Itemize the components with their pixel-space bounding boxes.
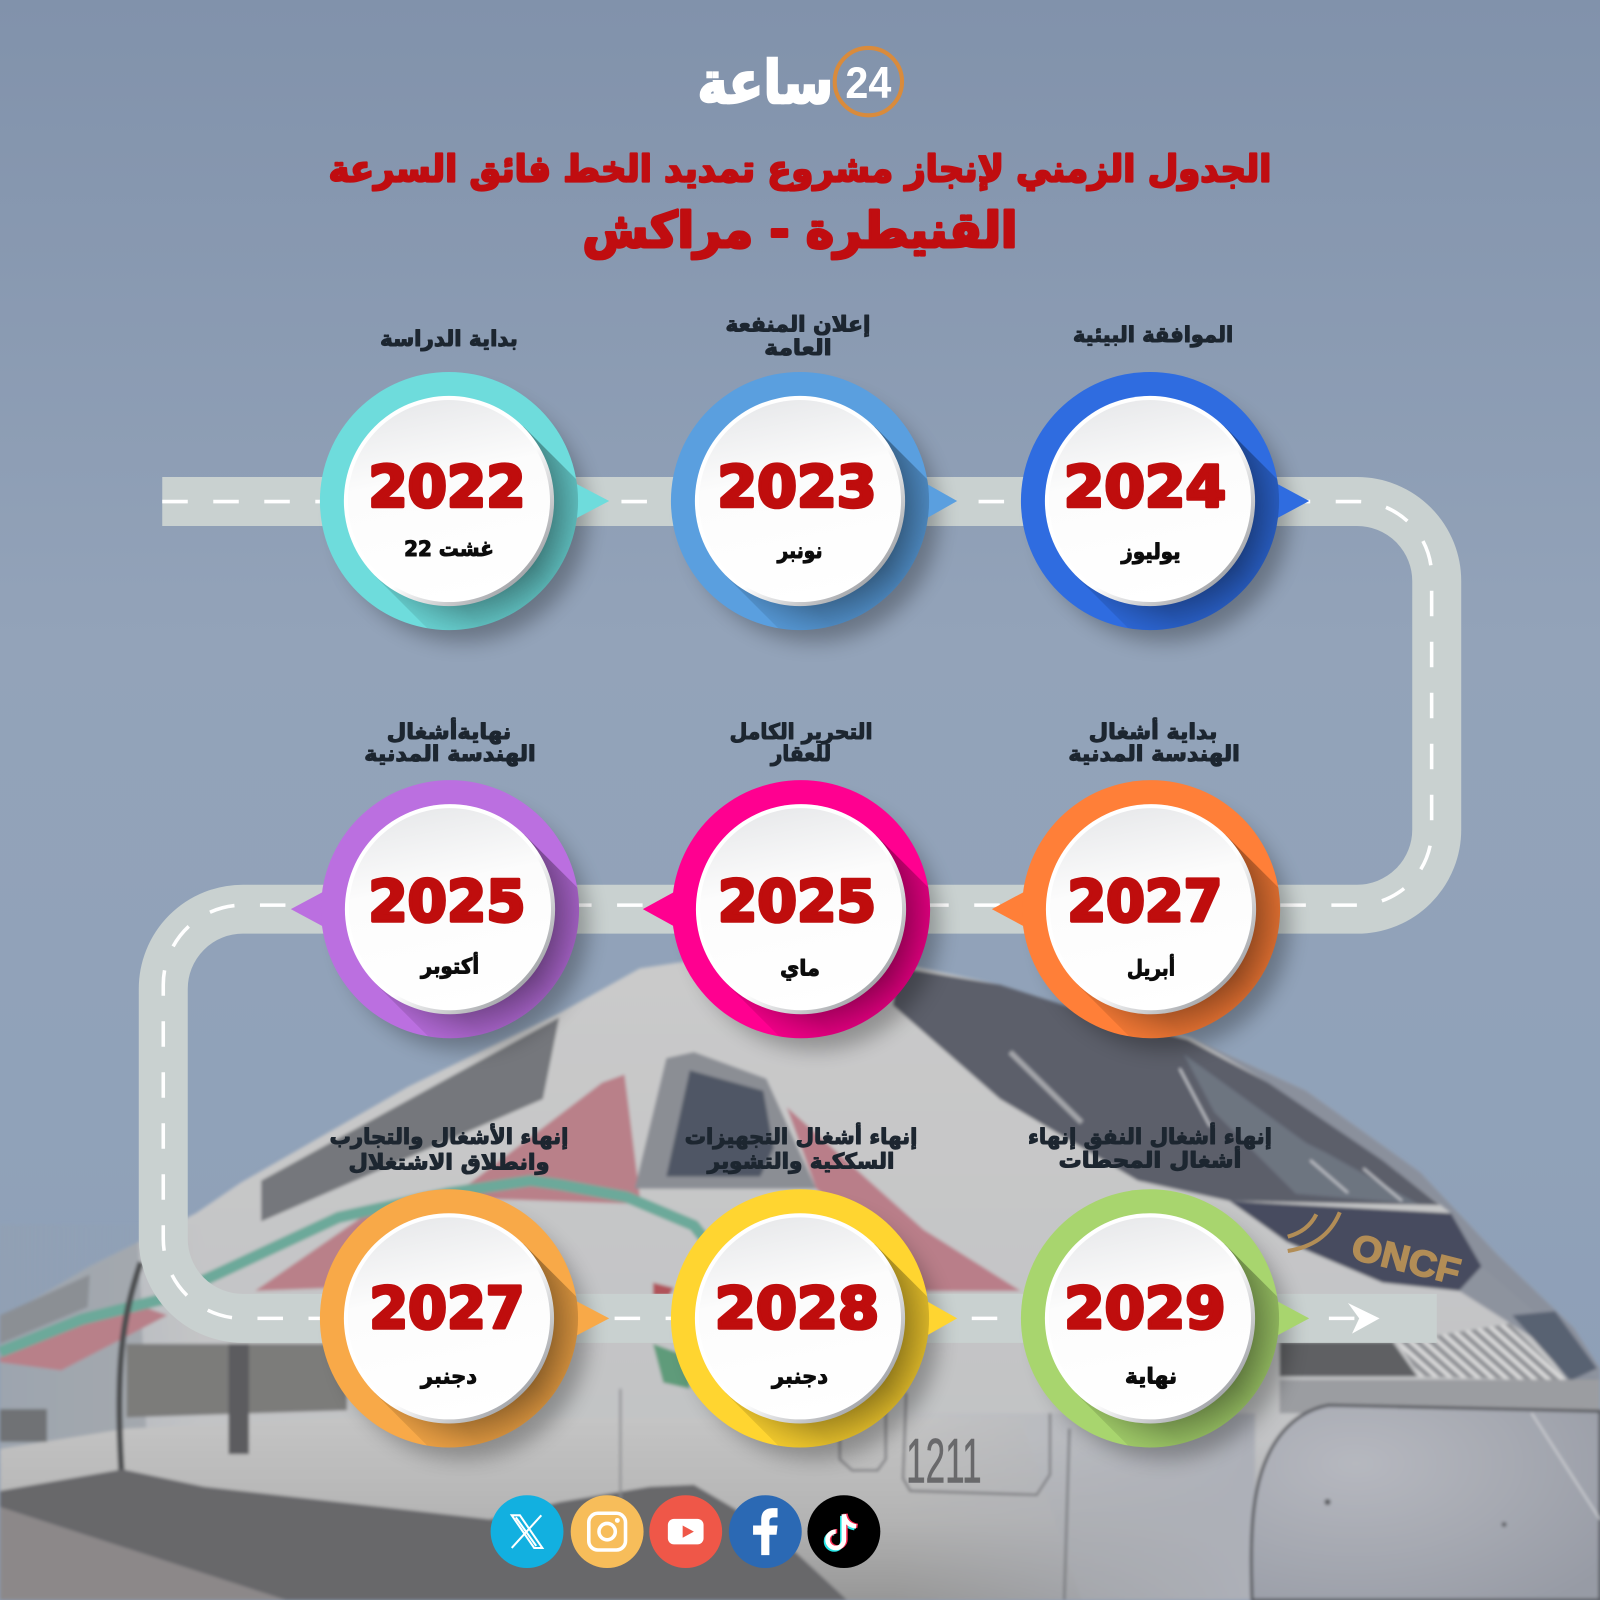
train livery: 1211	[906, 1427, 982, 1497]
icon: Facebook	[729, 1495, 802, 1568]
milestone 2024: 2024	[1064, 455, 1226, 521]
milestone 2025 may	[642, 780, 950, 1060]
milestone 2024: يوليوز	[1121, 540, 1181, 565]
milestone labels row 2: التحرير الكامل	[730, 720, 872, 745]
milestone 2028: 2028	[715, 1276, 879, 1342]
milestone labels row 3: إنهاء الأشغال والتجارب	[330, 1123, 568, 1150]
milestone labels row 1: بداية الدراسة	[380, 327, 518, 352]
milestone labels row 3: وانطلاق الاشتغلال	[348, 1150, 549, 1175]
train livery: ONCF	[1348, 1226, 1465, 1293]
milestone 2025 may: ماي	[780, 957, 820, 982]
train livery	[906, 1212, 1465, 1497]
milestone labels row 2: الهندسة المدنية	[1068, 742, 1240, 767]
milestone labels row 1: العامة	[764, 336, 832, 361]
milestone labels row 1	[380, 313, 1233, 361]
milestone 2028: دجنبر	[771, 1365, 828, 1390]
milestone 2022	[320, 372, 609, 651]
milestone 2027 december: 2027	[369, 1276, 524, 1342]
milestone 2023: 2023	[717, 455, 877, 521]
milestone labels row 3	[330, 1122, 1272, 1175]
milestone 2027 april: 2027	[1067, 869, 1222, 935]
milestone 2025 october: أكتوبر	[420, 951, 479, 979]
milestone labels row 3: السككية والتشوير	[707, 1149, 894, 1174]
milestone 2029: نهاية	[1125, 1365, 1177, 1390]
icon: Instagram	[571, 1495, 644, 1568]
milestone 2023	[670, 372, 957, 651]
milestone 2029	[1020, 1189, 1309, 1468]
winding road timeline	[162, 502, 1437, 1334]
milestone 2027 april: أبريل	[1127, 954, 1175, 982]
milestone 2022: 2022	[368, 455, 526, 521]
milestone labels row 3: إنهاء أشغال التجهيزات	[685, 1122, 917, 1150]
title	[329, 148, 1271, 259]
milestone 2027 december	[320, 1189, 610, 1469]
milestone labels row 2: بداية أشغال	[1089, 717, 1217, 745]
icon: YouTube	[649, 1495, 722, 1568]
milestone labels row 1: إعلان المنفعة	[726, 313, 870, 338]
milestone labels row 2: الهندسة المدنية	[364, 742, 536, 767]
milestone 2024	[1020, 372, 1309, 651]
milestone labels row 3: أشغال المحطات	[1059, 1145, 1241, 1173]
milestone labels row 3: إنهاء أشغال النفق إنهاء	[1028, 1122, 1272, 1150]
milestone 2027 december: دجنبر	[420, 1365, 477, 1390]
milestone 2029: 2029	[1064, 1276, 1226, 1342]
background train photo	[0, 954, 1600, 1600]
milestone 2022: 22 غشت	[404, 537, 494, 562]
milestone labels row 2	[364, 717, 1240, 767]
milestone labels row 2: نهايةأشغال	[387, 717, 511, 745]
milestone 2027 april	[992, 780, 1300, 1056]
social icons	[491, 1495, 880, 1568]
milestone 2028	[670, 1189, 958, 1469]
logo: 24	[845, 57, 891, 108]
milestone 2025 october: 2025	[368, 869, 526, 935]
icon: TikTok	[807, 1495, 880, 1568]
milestone labels row 2: للعقار	[770, 742, 831, 767]
title: الجدول الزمني لإنجاز مشروع تمديد الخط فائق السرعة	[329, 148, 1271, 191]
title: القنيطرة - مراكش	[583, 202, 1017, 259]
icon: X	[491, 1495, 563, 1568]
milestone labels row 1: الموافقة البيئية	[1073, 323, 1233, 348]
milestone 2025 may: 2025	[718, 869, 876, 935]
milestone 2025 october	[291, 780, 599, 1060]
milestone 2023: نونبر	[777, 539, 822, 564]
logo: ساعة	[697, 48, 833, 117]
